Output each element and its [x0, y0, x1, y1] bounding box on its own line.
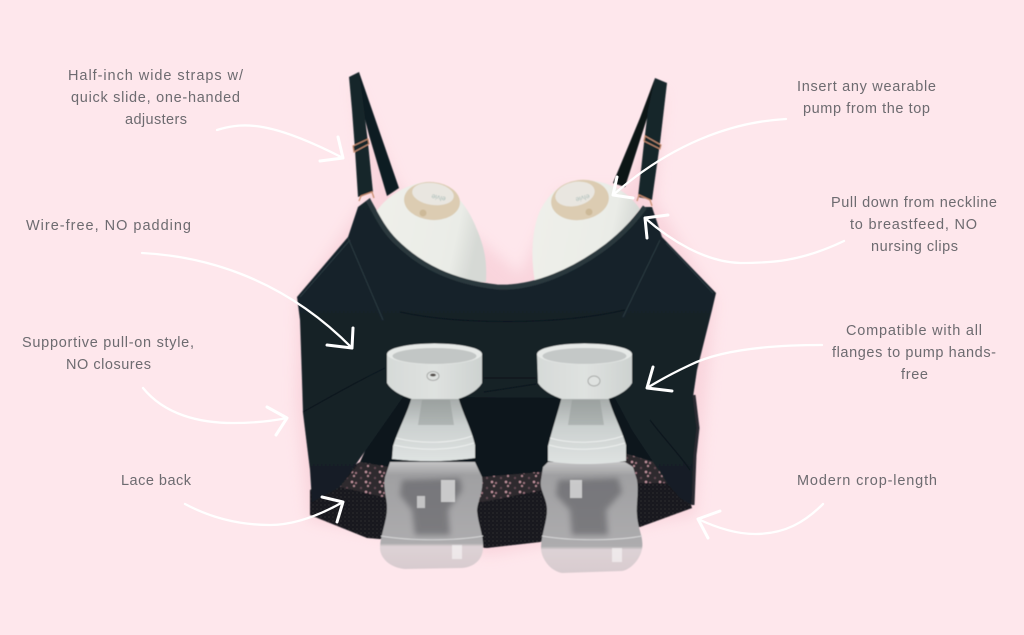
label: neckline — [831, 195, 997, 255]
arrow: crop length — [698, 504, 823, 538]
label: straps — [68, 68, 244, 128]
flange left — [387, 344, 482, 399]
label: straps: quick slide, one-handed — [71, 90, 240, 106]
label: neckline: nursing clips — [871, 239, 958, 255]
label: insert pump: Insert any wearable — [797, 79, 936, 95]
collar right — [548, 396, 626, 464]
shadow behind garment — [296, 78, 715, 555]
label: pull-on style — [22, 335, 194, 373]
collar left — [392, 396, 475, 461]
label: insert pump: pump from the top — [803, 101, 930, 117]
label: flanges — [832, 323, 996, 383]
dark inner panel — [360, 385, 657, 477]
bottle right — [541, 462, 642, 573]
label: neckline: to breastfeed, NO — [850, 217, 977, 233]
label: pull-on style: NO closures — [66, 357, 151, 373]
label: wire-free: Wire-free, NO padding — [26, 218, 191, 234]
strap right — [613, 78, 667, 206]
arrow: straps — [217, 125, 343, 161]
fabric folds — [303, 310, 690, 470]
arrow: wire-free — [142, 253, 353, 348]
lace edge right — [693, 395, 698, 505]
strap left — [349, 72, 399, 201]
arrow: neckline — [645, 215, 844, 263]
flange right — [537, 344, 632, 399]
label: flanges: Compatible with all — [846, 323, 982, 339]
product: bra with pump cups — [297, 72, 716, 573]
pump cup left — [376, 180, 486, 282]
pump cup left: elvie — [431, 192, 446, 202]
seams — [300, 238, 713, 320]
label: flanges: free — [901, 367, 928, 383]
label: straps: Half-inch wide straps w/ — [68, 68, 244, 84]
label: neckline: Pull down from neckline — [831, 195, 997, 211]
arrow: lace back — [185, 497, 343, 525]
label: insert pump — [797, 79, 936, 117]
arrow: flanges — [647, 345, 822, 391]
lace back layer — [310, 453, 692, 548]
pump cup right: elvie — [574, 192, 590, 203]
pink lace band — [340, 453, 667, 502]
garment body — [297, 198, 716, 505]
neckline binding — [368, 200, 645, 287]
pump cup right — [532, 176, 640, 282]
label: straps: adjusters — [125, 112, 187, 128]
label: flanges: flanges to pump hands- — [832, 345, 996, 361]
arrow: pull-on — [143, 388, 287, 435]
arrow: insert pump — [613, 119, 786, 198]
label: lace back: Lace back — [121, 473, 192, 489]
label: crop length: Modern crop-length — [797, 473, 937, 489]
label: pull-on style: Supportive pull-on style, — [22, 335, 194, 351]
bottle left — [380, 462, 483, 569]
